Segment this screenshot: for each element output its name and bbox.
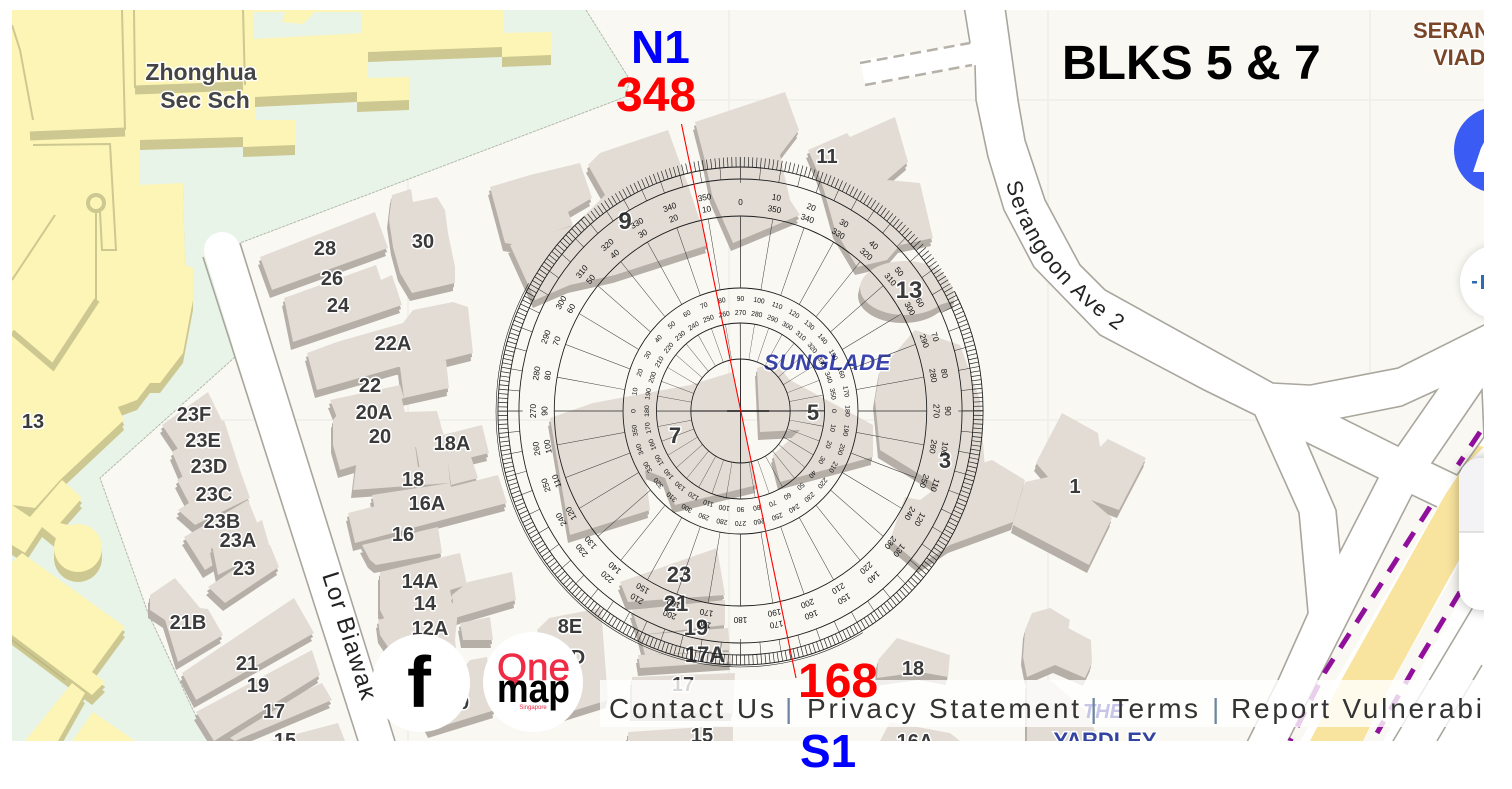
protractor inner scale labels: 30	[816, 455, 826, 465]
protractor outer scale labels: 190	[767, 607, 782, 619]
south label S1: S1	[800, 725, 856, 777]
protractor outer scale labels: 150	[836, 591, 852, 607]
protractor outer scale labels: 60	[564, 301, 578, 315]
protractor outer scale labels: 30	[636, 226, 649, 240]
building number labels: 1	[1069, 476, 1081, 498]
protractor overlay	[496, 155, 985, 667]
protractor outer scale labels: 340	[662, 200, 678, 214]
footer link bar: |	[785, 693, 792, 724]
protractor inner scale labels: 10	[828, 423, 836, 433]
protractor inner scale labels: 190	[841, 424, 850, 437]
protractor inner scale labels: 90	[737, 296, 744, 303]
protractor outer scale labels: 250	[539, 476, 553, 494]
building number labels: 17	[263, 701, 285, 723]
protractor outer scale labels: 330	[830, 225, 847, 242]
protractor inner scale labels: 160	[835, 366, 846, 380]
protractor outer scale labels: 210	[628, 591, 645, 607]
footer link bar: Privacy Statement	[807, 693, 1079, 724]
protractor outer scale labels: 160	[665, 596, 682, 611]
protractor inner scale labels: 240	[687, 320, 701, 333]
protractor outer scale labels: 170	[769, 619, 784, 631]
protractor inner scale labels: 200	[835, 442, 846, 456]
protractor outer scale labels: 50	[893, 265, 906, 279]
protractor outer scale labels: 40	[608, 247, 621, 261]
footer link bar: Terms	[1112, 693, 1198, 724]
building number labels: 14	[414, 593, 437, 615]
protractor outer scale labels: 180	[733, 615, 747, 625]
protractor outer scale labels: 260	[530, 440, 542, 457]
protractor inner scale labels: 340	[823, 371, 833, 385]
protractor outer scale labels: 70	[929, 331, 942, 343]
building number labels: 3	[939, 448, 951, 473]
protractor outer scale labels: 10	[771, 191, 782, 203]
protractor inner scale labels: 60	[782, 490, 792, 501]
protractor inner scale labels: 310	[794, 330, 807, 343]
red bearing line 348 to 168	[682, 124, 796, 678]
icon: OneMap logo: One	[497, 647, 570, 689]
protractor outer scale labels: 350	[767, 203, 782, 215]
protractor inner scale labels: 250	[702, 314, 715, 325]
building number labels: 20	[369, 426, 391, 448]
protractor outer scale labels: 290	[539, 328, 553, 345]
building number labels: D	[571, 647, 585, 669]
building number labels: 22A	[375, 333, 411, 355]
protractor outer scale labels: 110	[550, 473, 563, 489]
protractor outer scale labels: 190	[697, 618, 712, 631]
protractor outer scale labels: 80	[939, 368, 950, 379]
building number labels: 19	[684, 615, 708, 640]
building number labels: 23F	[177, 404, 211, 426]
protractor inner scale labels: 330	[642, 460, 654, 474]
school grounds yellow	[12, 10, 551, 741]
protractor outer scale labels: 270	[528, 404, 538, 418]
protractor outer scale labels	[528, 191, 953, 631]
building number labels: 18A	[434, 433, 470, 455]
building number labels: 16A	[409, 493, 445, 515]
protractor inner scale labels: 350	[631, 424, 640, 437]
heading: Zhonghua Sec Sch: Zhonghua	[145, 59, 257, 85]
protractor inner scale labels: 260	[718, 310, 731, 319]
heading: Zhonghua Sec Sch: Sec Sch	[160, 87, 250, 113]
protractor inner scale labels: 350	[828, 388, 837, 401]
place label: Serangoon Viaduct	[1412, 21, 1484, 66]
footer link bar	[600, 680, 1484, 727]
protractor inner scale labels: 290	[766, 314, 779, 325]
protractor inner scale labels: 150	[654, 453, 666, 467]
protractor inner scale labels: 170	[644, 421, 653, 434]
protractor inner scale labels: 230	[674, 330, 687, 343]
protractor outer scale labels: 310	[574, 262, 590, 280]
building number labels: 23C	[196, 484, 232, 506]
protractor inner scale labels: 150	[827, 348, 839, 362]
protractor inner scale labels: 40	[654, 334, 664, 345]
protractor inner scale labels: 130	[674, 479, 687, 492]
protractor crosshair	[498, 157, 983, 665]
protractor outer scale labels: 120	[563, 505, 579, 522]
protractor outer scale labels: 30	[838, 216, 851, 230]
icon: OneMap logo: map	[497, 667, 570, 711]
protractor inner scale labels: 100	[753, 297, 765, 306]
building number labels: 23	[233, 558, 255, 580]
road label: Lor Biawak: Lor Biawak	[316, 569, 382, 704]
protractor outer scale labels: 40	[867, 238, 881, 252]
place label: Serangoon Viaduct: SERAN	[1413, 18, 1490, 43]
building number labels: 23A	[220, 530, 256, 552]
protractor outer scale labels: 330	[629, 215, 645, 231]
protractor outer scale labels: 300	[902, 300, 918, 317]
protractor inner scale labels: 280	[716, 516, 728, 525]
protractor inner scale labels: 110	[702, 497, 715, 508]
protractor outer scale labels: 320	[599, 236, 616, 253]
icon: zoom control button	[1458, 244, 1484, 320]
protractor inner scale labels: 230	[802, 490, 815, 503]
building number labels: 28	[314, 238, 336, 260]
protractor inner scale labels: 80	[718, 297, 726, 305]
building number labels: 12A	[412, 618, 448, 640]
protractor inner scale labels: 300	[781, 321, 794, 333]
protractor inner scale labels: 40	[807, 468, 817, 479]
protractor outer scale labels: 60	[914, 296, 927, 309]
protractor inner scale labels: 140	[663, 467, 675, 480]
south bearing 168: 168	[798, 655, 878, 708]
footer link bar: Contact Us	[609, 693, 774, 724]
protractor outer scale labels: 0	[738, 197, 743, 207]
title: BLKS 5 & 7: BLKS 5 & 7	[1062, 37, 1321, 90]
building number labels: 17A	[685, 642, 725, 667]
protractor inner scale labels: 50	[795, 480, 805, 491]
building number labels: 19	[247, 675, 269, 697]
building number labels: 16A	[897, 731, 933, 753]
protractor inner scale labels: 210	[654, 355, 666, 369]
protractor outer scale labels: 110	[928, 477, 942, 494]
protractor inner scale labels: 30	[643, 350, 653, 360]
buildings	[150, 92, 1146, 741]
protractor inner scale labels: 320	[806, 342, 818, 355]
building number labels: 18	[402, 469, 424, 491]
road label: Serangoon Ave 2: Serangoon Ave 2	[1007, 181, 1124, 330]
building number labels: 5	[807, 400, 819, 425]
building number labels: 17	[672, 674, 694, 696]
building number labels	[22, 146, 1081, 753]
protractor inner scale labels: 90	[737, 505, 744, 512]
building number labels: 22	[359, 375, 381, 397]
protractor outer scale labels: 50	[584, 272, 597, 286]
road: Lor Biawak	[203, 243, 395, 745]
protractor inner scale labels: 70	[768, 498, 777, 507]
protractor inner scale labels: 300	[681, 501, 694, 514]
protractor inner scale labels: 120	[687, 489, 700, 501]
building number labels: 26	[321, 268, 343, 290]
protractor outer scale labels: 230	[882, 534, 899, 552]
protractor outer scale labels: 130	[891, 542, 907, 560]
building number labels: 21B	[170, 612, 206, 634]
protractor outer scale labels: 350	[697, 191, 712, 203]
place label: Serangoon Viaduct: VIAD	[1433, 45, 1486, 70]
protractor outer scale labels: 10	[701, 203, 712, 215]
protractor outer scale labels: 200	[799, 596, 816, 611]
building number labels: 15	[691, 725, 713, 747]
protractor inner scale labels: 310	[665, 490, 678, 503]
building number labels: 7	[669, 423, 681, 448]
protractor inner scale labels: 20	[823, 439, 833, 449]
building number labels: 10	[447, 692, 469, 714]
building number labels: 18	[902, 658, 924, 680]
protractor outer scale labels: 20	[668, 212, 680, 225]
protractor outer scale labels: 150	[634, 580, 651, 597]
north label N1: N1	[631, 21, 690, 73]
footer link bar: |	[1090, 693, 1097, 724]
protractor outer scale labels: 200	[661, 608, 678, 622]
protractor inner scale labels: 140	[816, 333, 828, 346]
icon: location button	[1454, 109, 1484, 191]
protractor outer scale labels: 140	[865, 569, 882, 586]
protractor outer scale labels: 280	[927, 368, 939, 384]
protractor outer scale labels: 250	[917, 473, 931, 490]
protractor outer scale labels: 100	[939, 441, 951, 457]
icon: Facebook button: f	[407, 643, 432, 723]
protractor inner scale labels: 0	[631, 409, 637, 413]
protractor outer scale labels: 70	[550, 334, 563, 347]
protractor outer scale labels: 260	[927, 439, 939, 455]
protractor inner scale labels: 240	[787, 502, 800, 514]
building number labels: 13	[896, 277, 922, 304]
protractor outer scale labels: 170	[699, 607, 714, 619]
protractor outer scale labels: 220	[858, 560, 875, 577]
protractor degree ticks	[503, 162, 978, 660]
protractor inner scale labels: 50	[667, 320, 677, 331]
icon: Facebook button	[372, 634, 470, 732]
protractor outer scale labels: 100	[542, 438, 554, 454]
protractor inner scale labels: 130	[803, 319, 816, 332]
protractor inner scale labels: 220	[816, 476, 828, 490]
protractor inner scale labels: 270	[735, 310, 746, 317]
protractor outer scale labels: 320	[858, 245, 875, 263]
protractor inner scale labels: 290	[697, 510, 710, 521]
protractor outer scale labels: 270	[931, 404, 941, 418]
protractor outer scale labels: 290	[918, 332, 932, 350]
protractor inner scale labels: 200	[648, 371, 658, 384]
building number labels: 20A	[356, 402, 392, 424]
protractor inner scale labels: 250	[770, 510, 783, 521]
protractor inner scale labels: 60	[682, 309, 692, 319]
side control panel	[1452, 451, 1484, 617]
expressway strips and rail line	[1288, 390, 1484, 741]
protractor inner scale labels: 160	[648, 437, 658, 451]
protractor inner scale labels: 10	[632, 387, 640, 396]
protractor outer scale labels: 310	[882, 270, 899, 288]
protractor outer scale labels: 80	[542, 369, 553, 381]
protractor inner scale labels: 180	[844, 405, 850, 417]
protractor outer scale labels: 90	[540, 406, 550, 416]
protractor inner scale labels: 180	[644, 405, 651, 417]
protractor outer scale labels: 240	[553, 511, 569, 528]
protractor inner scale labels: 0	[830, 409, 837, 413]
building number labels: 16	[392, 524, 414, 546]
protractor inner scale labels: 220	[663, 341, 675, 355]
protractor outer scale labels: 90	[943, 406, 953, 416]
footer link bar: Report Vulnerabi	[1231, 693, 1482, 724]
protractor inner scale labels: 110	[771, 301, 783, 312]
protractor inner scale labels: 210	[827, 460, 838, 474]
building number labels: 23	[667, 562, 691, 587]
protractor inner scale labels: 280	[751, 310, 763, 320]
building number labels: 23E	[185, 430, 221, 452]
building number labels: 9	[618, 208, 632, 235]
protractor outer scale labels: 210	[830, 581, 847, 597]
footer link bar: THE	[1083, 701, 1124, 723]
place label: The Yardley: YARDLEY	[1053, 728, 1157, 753]
protractor inner scale labels: 330	[815, 355, 827, 369]
footer link bar: |	[1212, 693, 1219, 724]
protractor outer scale labels: 20	[805, 201, 818, 214]
building number labels: 15	[274, 730, 296, 752]
protractor rings	[496, 155, 985, 667]
protractor outer scale labels: 160	[803, 608, 819, 622]
building number labels: 21	[664, 591, 688, 616]
protractor inner scale labels: 100	[718, 502, 730, 512]
protractor inner scale labels: 320	[653, 476, 665, 489]
building number labels: 8E	[558, 616, 582, 638]
place label: Sunglade: SUNGLADE	[764, 350, 892, 375]
park green area	[0, 0, 630, 760]
icon: OneMap logo	[483, 632, 583, 732]
building number labels: 24	[327, 295, 350, 317]
protractor outer scale labels: 230	[573, 542, 590, 559]
building number labels: 23D	[191, 456, 227, 478]
building number labels: 23B	[204, 511, 240, 533]
protractor outer scale labels: 130	[582, 534, 599, 552]
protractor inner scale labels	[631, 296, 850, 526]
protractor inner scale labels: 190	[644, 388, 653, 400]
building number labels: 14A	[402, 571, 438, 593]
road: Serangoon Ave 2 and junction	[860, 0, 1500, 780]
protractor inner scale labels: 260	[753, 516, 765, 525]
protractor inner scale labels: 340	[635, 442, 646, 456]
building number labels: 11	[816, 146, 838, 168]
heading: Zhonghua Sec Sch	[145, 59, 257, 113]
protractor outer scale labels: 340	[799, 211, 816, 226]
protractor outer scale labels: 240	[902, 505, 918, 523]
building number labels: 30	[412, 231, 434, 253]
protractor outer scale labels: 300	[553, 293, 569, 311]
icon: OneMap logo: Singapore	[519, 705, 547, 711]
protractor outer scale labels: 120	[912, 511, 928, 529]
building number labels: 13	[22, 411, 44, 433]
protractor inner scale labels: 70	[699, 301, 709, 311]
protractor outer scale labels: 220	[599, 569, 616, 586]
protractor outer scale labels: 140	[606, 559, 623, 577]
protractor inner scale labels: 120	[787, 308, 800, 321]
protractor inner scale labels: 170	[841, 385, 850, 398]
building number labels: 21	[236, 653, 258, 675]
protractor inner scale labels: 270	[735, 519, 746, 526]
protractor inner scale labels: 20	[636, 368, 645, 378]
protractor inner scale labels: 80	[752, 503, 761, 511]
protractor outer scale labels: 280	[530, 365, 542, 381]
north bearing 348: 348	[616, 69, 696, 122]
